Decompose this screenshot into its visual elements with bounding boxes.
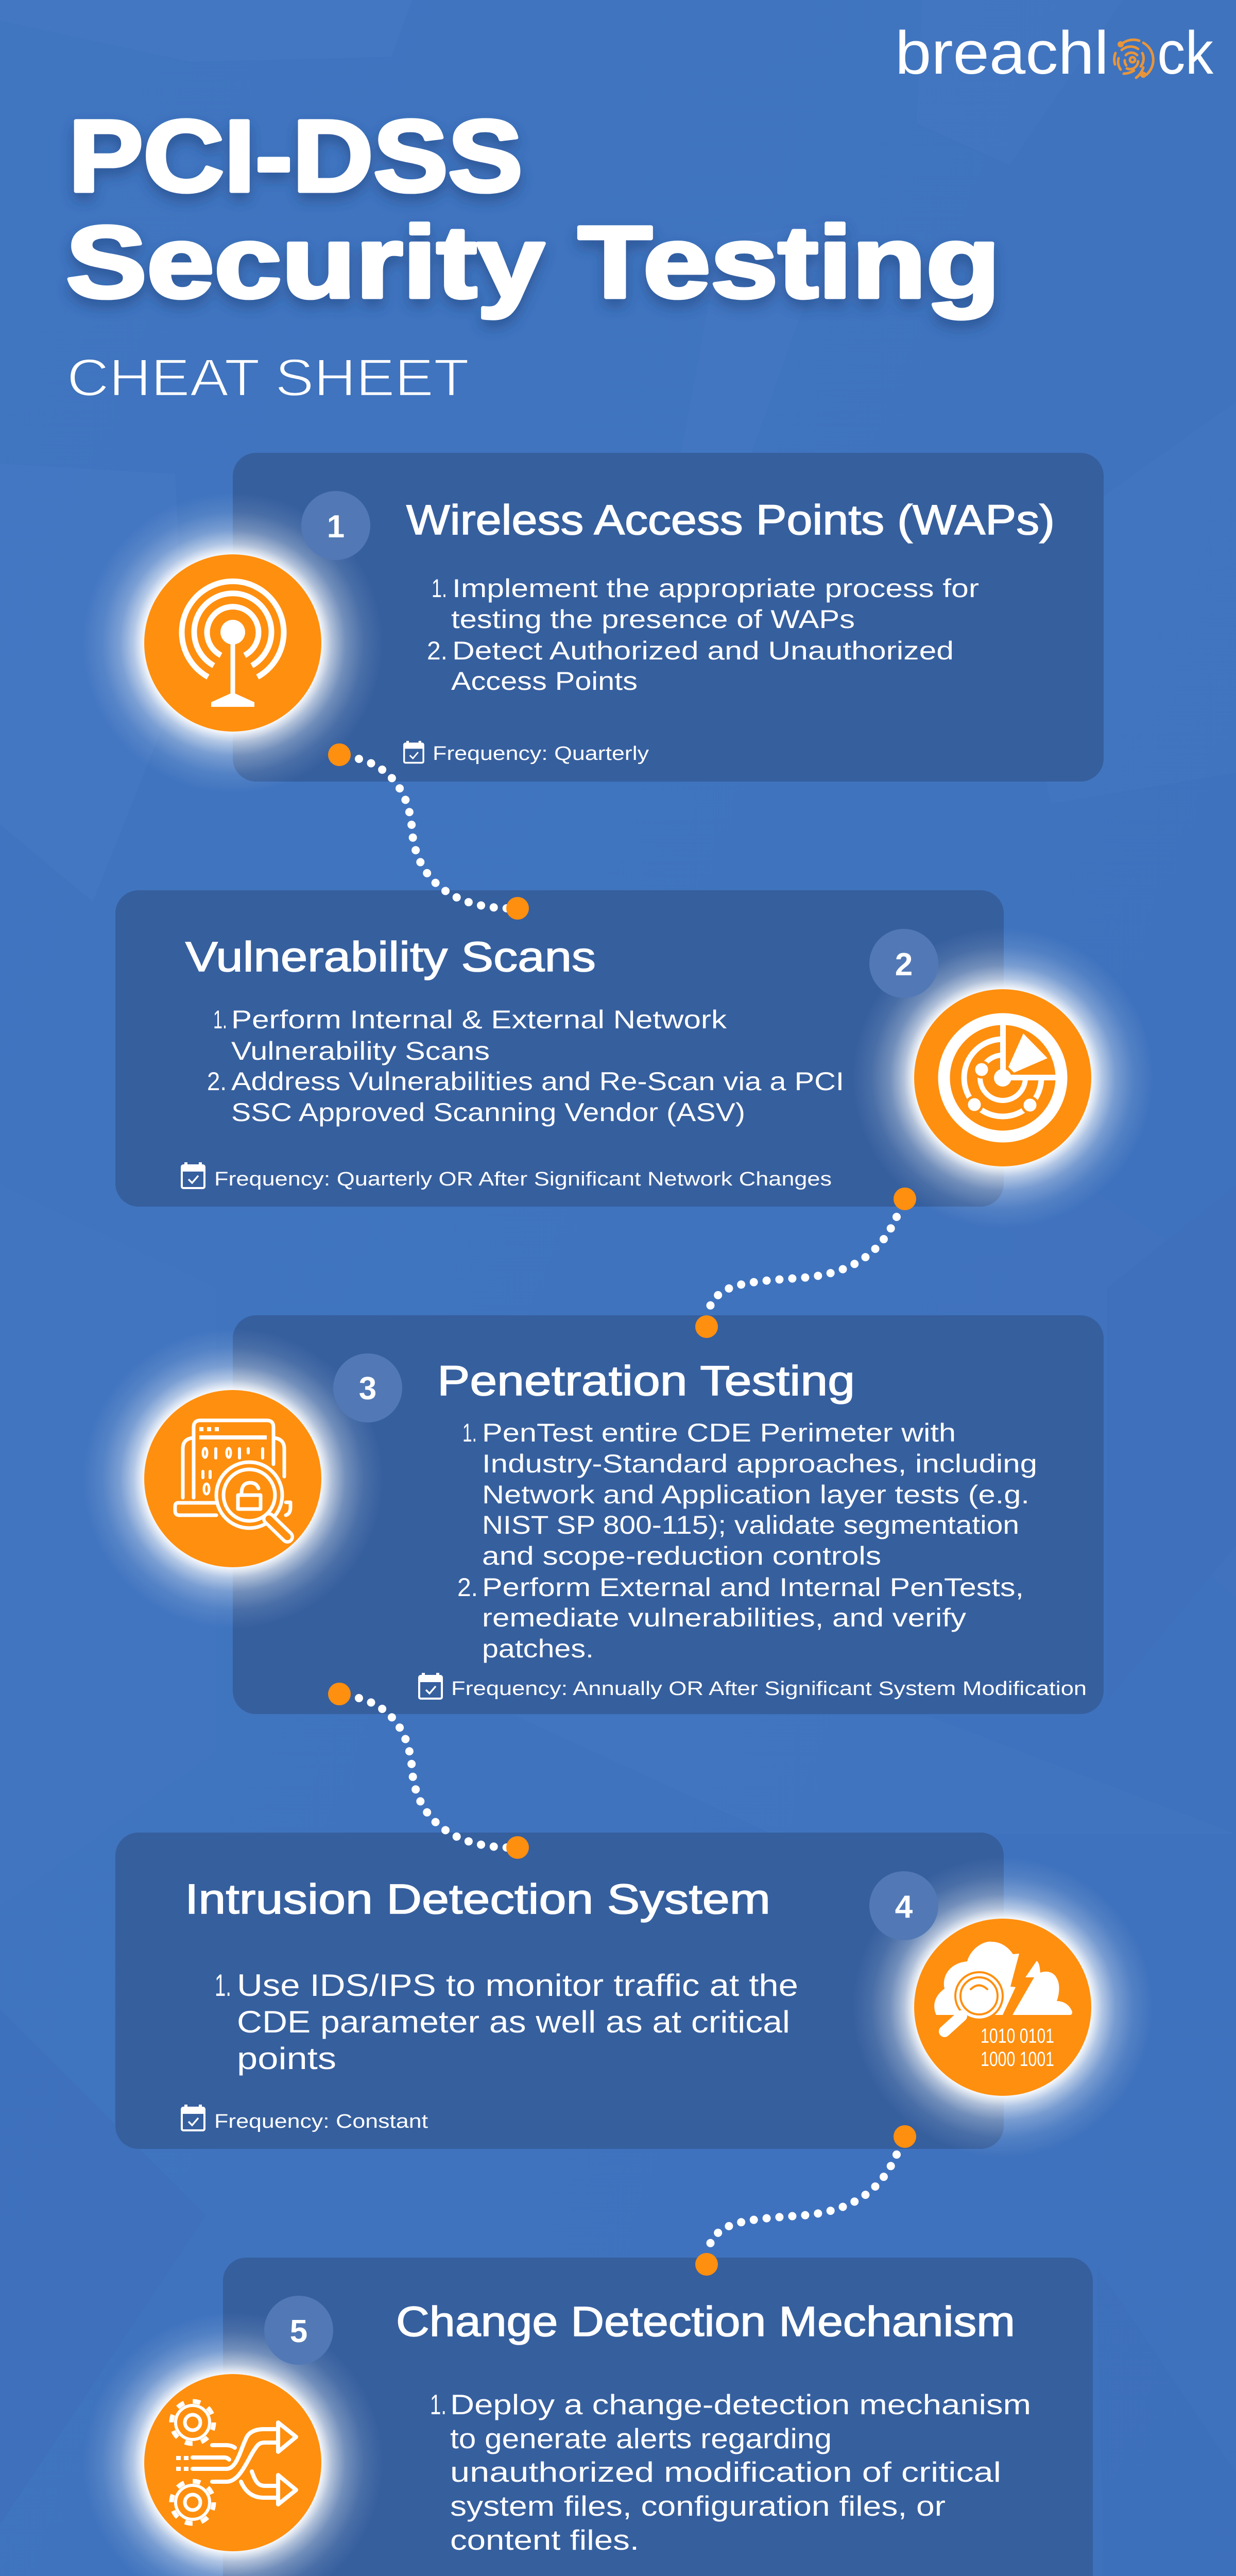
list bbox=[457, 1418, 1037, 1663]
list: 1. bbox=[432, 574, 447, 603]
panel: step 1 wireless access points bbox=[82, 453, 1104, 793]
list bbox=[430, 2388, 1031, 2556]
icon: cloud with magnifier and binary: 1010 0101 bbox=[981, 2025, 1054, 2047]
list: NIST SP 800-115); validate segmentation bbox=[482, 1511, 1019, 1539]
list: CDE parameter as well as at critical bbox=[237, 2005, 790, 2039]
panel: step 5 change detection mechanism bbox=[82, 2258, 1093, 2576]
badge 5 bbox=[264, 2296, 333, 2365]
logo: breachlock bbox=[895, 19, 1214, 87]
frequency bbox=[419, 1673, 1087, 1700]
connector: step 3 to step 4 bbox=[328, 1683, 529, 1859]
list: Use IDS/IPS to monitor traffic at the bbox=[237, 1968, 798, 2003]
badge 5: 5 bbox=[290, 2314, 307, 2349]
heading: Wireless Access Points (WAPs) bbox=[406, 497, 1055, 544]
title bbox=[66, 99, 1000, 319]
list: unauthorized modification of critical bbox=[450, 2456, 1001, 2488]
list: patches. bbox=[482, 1634, 594, 1663]
badge 4: 4 bbox=[895, 1889, 913, 1925]
list: testing the presence of WAPs bbox=[451, 605, 855, 634]
list: 1. bbox=[213, 1005, 227, 1034]
list: 2. bbox=[457, 1573, 478, 1602]
list: Industry-Standard approaches, including bbox=[482, 1449, 1037, 1478]
badge 1 bbox=[301, 491, 370, 560]
list: Deploy a change-detection mechanism bbox=[450, 2388, 1031, 2420]
list bbox=[215, 1968, 798, 2076]
subtitle: CHEAT SHEET bbox=[67, 348, 469, 407]
heading: Penetration Testing bbox=[437, 1358, 855, 1404]
title: Security Testing bbox=[66, 205, 1000, 319]
list: system files, configuration files, or bbox=[450, 2490, 946, 2522]
connector: step 1 to step 2 bbox=[328, 743, 529, 920]
list: Network and Application layer tests (e.g. bbox=[482, 1480, 1029, 1509]
list: points bbox=[237, 2041, 336, 2076]
list: 1. bbox=[215, 1968, 231, 2003]
list: 1. bbox=[462, 1418, 477, 1447]
heading: Vulnerability Scans bbox=[185, 934, 596, 980]
logo: breachlock: ck bbox=[1157, 19, 1214, 87]
icon: gears and arrows bbox=[144, 2374, 321, 2551]
list: Address Vulnerabilities and Re-Scan via a PCI bbox=[231, 1067, 844, 1096]
list: to generate alerts regarding bbox=[450, 2422, 832, 2454]
heading: Change Detection Mechanism bbox=[396, 2298, 1015, 2345]
list: Perform Internal & External Network bbox=[231, 1005, 727, 1034]
badge 3: 3 bbox=[359, 1371, 376, 1406]
list: 2. bbox=[427, 636, 448, 665]
connector: step 2 to step 3 bbox=[695, 1188, 916, 1338]
icon: cloud with magnifier and binary bbox=[914, 1919, 1091, 2096]
list: Implement the appropriate process for bbox=[452, 574, 979, 603]
list: 2. bbox=[207, 1067, 227, 1096]
panel: step 3 penetration testing bbox=[82, 1315, 1104, 1714]
badge 2 bbox=[869, 929, 938, 998]
badge 2: 2 bbox=[895, 947, 913, 982]
connector: step 4 to step 5 bbox=[695, 2125, 916, 2276]
list: Perform External and Internal PenTests, bbox=[482, 1573, 1024, 1602]
list bbox=[427, 574, 979, 696]
frequency: Frequency: Quarterly bbox=[433, 743, 649, 765]
badge 3 bbox=[333, 1353, 402, 1422]
icon: fingerprint bbox=[1114, 40, 1153, 78]
list: PenTest entire CDE Perimeter with bbox=[482, 1418, 956, 1447]
badge 4 bbox=[869, 1871, 938, 1940]
list: 1. bbox=[430, 2388, 447, 2420]
list: and scope-reduction controls bbox=[482, 1541, 881, 1570]
icon: antenna bbox=[144, 554, 321, 732]
icon: radar bbox=[914, 989, 1091, 1166]
frequency: Frequency: Quarterly OR After Significant Network Changes bbox=[214, 1168, 832, 1190]
panel: step 2 vulnerability scans bbox=[115, 890, 1153, 1228]
list: Vulnerability Scans bbox=[231, 1037, 490, 1065]
list: SSC Approved Scanning Vendor (ASV) bbox=[231, 1098, 745, 1127]
frequency bbox=[182, 1162, 832, 1190]
icon: code window with magnifier and lock bbox=[144, 1390, 321, 1567]
badge 1: 1 bbox=[327, 509, 345, 545]
heading: Intrusion Detection System bbox=[185, 1876, 770, 1923]
list: Detect Authorized and Unauthorized bbox=[452, 636, 954, 665]
frequency: Frequency: Annually OR After Significant System Modification bbox=[451, 1678, 1087, 1700]
list bbox=[207, 1005, 844, 1127]
logo: breachlock: breachl bbox=[895, 19, 1109, 87]
title: PCI-DSS bbox=[68, 99, 523, 213]
list: content files. bbox=[450, 2524, 639, 2556]
panel: step 4 intrusion detection system bbox=[115, 1833, 1153, 2158]
icon: cloud with magnifier and binary: 1000 1001 bbox=[981, 2048, 1054, 2071]
frequency bbox=[182, 2105, 428, 2132]
list: Access Points bbox=[451, 667, 638, 696]
list: remediate vulnerabilities, and verify bbox=[482, 1603, 966, 1632]
frequency: Frequency: Constant bbox=[214, 2111, 428, 2132]
frequency bbox=[404, 741, 649, 765]
